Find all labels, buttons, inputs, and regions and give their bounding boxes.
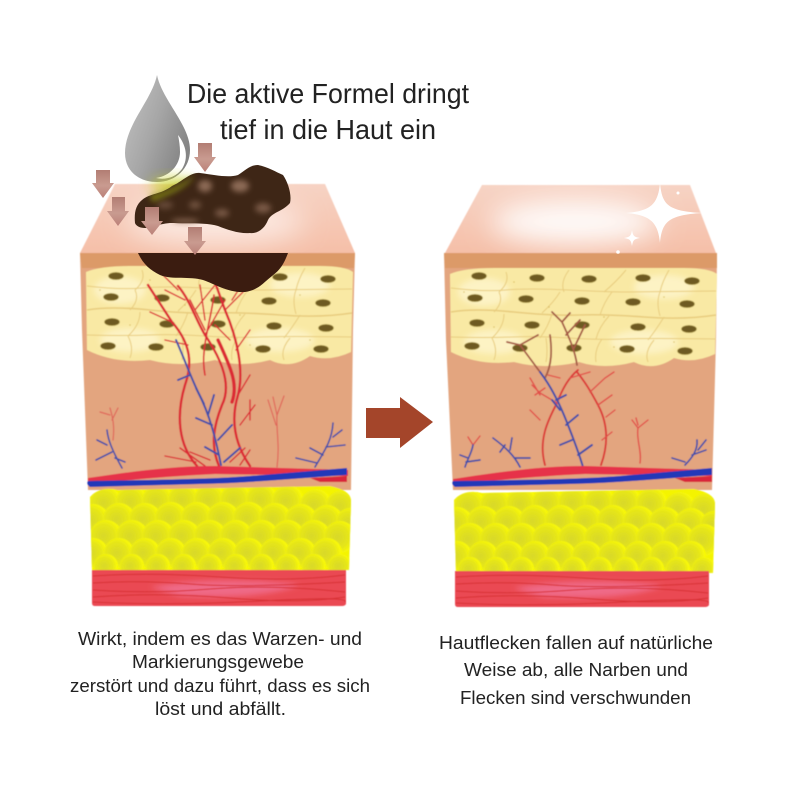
dermis layer [444, 253, 717, 490]
arrow 3 [141, 207, 163, 235]
skin top surface [80, 184, 355, 253]
arrow 4 [184, 227, 206, 255]
dermis layer [80, 253, 355, 490]
text: left caption: Markierungsgewebe [132, 651, 304, 672]
cell nuclei [100, 272, 336, 353]
lower wart in skin [138, 253, 288, 292]
fat layer [441, 487, 728, 581]
cell nuclei [464, 272, 700, 355]
text: left caption: zerstört und dazu führt, dass es sich [70, 675, 370, 696]
heading [187, 78, 469, 145]
heading: Die aktive Formel dringt [187, 78, 469, 109]
icon: sparkle [616, 183, 702, 254]
fat layer [77, 484, 364, 578]
arrow: before to after [366, 397, 433, 448]
text: right caption: Weise ab, alle Narben und [464, 659, 688, 680]
arrow 5 [194, 143, 216, 172]
panel: skin block before treatment [77, 184, 364, 606]
text: left caption [70, 628, 370, 719]
epidermis band [444, 253, 717, 268]
muscle layer [92, 570, 346, 606]
wart on skin surface [135, 165, 291, 233]
arrow 2 [107, 197, 129, 226]
arrows pressing into skin [92, 143, 216, 255]
cell layer [450, 268, 717, 366]
main horizontal vessels [452, 466, 712, 487]
skin top surface [445, 185, 716, 253]
text: left caption: löst und abfällt. [155, 698, 286, 719]
icon: active formula drop [125, 75, 190, 182]
cell layer [86, 266, 353, 364]
epidermis band [80, 253, 355, 268]
text: right caption: Flecken sind verschwunden [460, 687, 691, 708]
arrow 1 [92, 170, 114, 198]
muscle layer [455, 571, 709, 607]
text: right caption: Hautflecken fallen auf natürliche [439, 632, 713, 653]
blood vessel network [96, 272, 345, 468]
heading: tief in die Haut ein [220, 114, 436, 145]
text: right caption [439, 632, 713, 708]
main horizontal vessels [87, 466, 348, 487]
text: left caption: Wirkt, indem es das Warzen- und [78, 628, 362, 649]
blood vessel network [460, 312, 706, 467]
panel: skin block after treatment [441, 185, 728, 607]
